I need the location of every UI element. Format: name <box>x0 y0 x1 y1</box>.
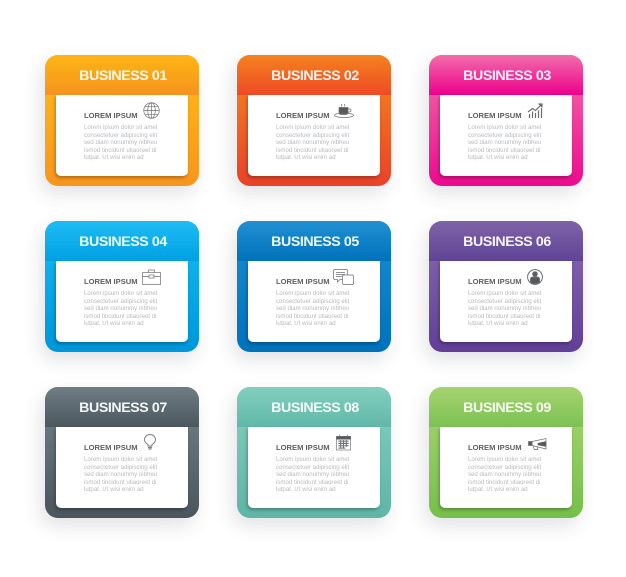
icon: person <box>527 269 543 285</box>
icon: chat bubbles <box>333 269 354 285</box>
body text 02: ismod tincidunt utiaoreet di <box>276 146 348 154</box>
body text 04: Lorem ipsum dolor sit amet <box>84 290 158 297</box>
subheading 04: LOREM IPSUM <box>84 277 138 286</box>
body text 09: Lorem ipsum dolor sit amet <box>468 456 542 463</box>
body text 07 <box>84 456 158 493</box>
icon: megaphone <box>528 438 546 450</box>
body text 08: ismod tincidunt utiaoreet di <box>276 478 348 486</box>
body text 02: Lorem ipsum dolor sit amet <box>276 124 350 131</box>
subheading 05: LOREM IPSUM <box>276 277 330 286</box>
heading 01: BUSINESS 01 <box>79 68 167 84</box>
white content panel 05 <box>248 261 380 342</box>
body text 06: Lorem ipsum dolor sit amet <box>468 290 542 297</box>
body text 09: lutpat. Ut wisi enim ad <box>468 486 528 493</box>
body text 01 <box>84 124 158 161</box>
icon: globe <box>143 102 160 119</box>
white content panel 03 <box>440 95 572 176</box>
panel: business 09 <box>429 387 583 518</box>
body text 06 <box>468 290 542 327</box>
body text 04 <box>84 290 158 327</box>
body text 03: lutpat. Ut wisi enim ad <box>468 154 528 161</box>
white content panel 07 <box>56 427 188 508</box>
panel: business 03 <box>429 55 583 186</box>
body text 09: ismod tincidunt utiaoreet di <box>468 478 540 486</box>
body text 08: sed diam nonummy nibheu <box>276 471 349 478</box>
body text 04: ismod tincidunt utiaoreet di <box>84 312 156 320</box>
heading 05: BUSINESS 05 <box>271 234 359 250</box>
header band 05 <box>237 221 391 261</box>
body text 07: ismod tincidunt utiaoreet di <box>84 478 156 486</box>
body text 06: ismod tincidunt utiaoreet di <box>468 312 540 320</box>
heading 06: BUSINESS 06 <box>463 234 551 250</box>
header band 01 <box>45 55 199 95</box>
body text 04: lutpat. Ut wisi enim ad <box>84 320 144 327</box>
subheading 06: LOREM IPSUM <box>468 277 522 286</box>
body text 05: sed diam nonummy nibheu <box>276 305 349 312</box>
body text 09 <box>468 456 542 493</box>
white content panel 02 <box>248 95 380 176</box>
header band 08 <box>237 387 391 427</box>
subheading 08: LOREM IPSUM <box>276 443 330 452</box>
panel: business 06 <box>429 221 583 352</box>
panel: business 05 <box>237 221 391 352</box>
body text 08: lutpat. Ut wisi enim ad <box>276 486 336 493</box>
body text 01: ismod tincidunt utiaoreet di <box>84 146 156 154</box>
subheading 02: LOREM IPSUM <box>276 111 330 120</box>
body text 04: consectetuer adipiscing elit <box>84 298 157 304</box>
body text 05: ismod tincidunt utiaoreet di <box>276 312 348 320</box>
panel: business 07 <box>45 387 199 518</box>
header band 06 <box>429 221 583 261</box>
body text 01: consectetuer adipiscing elit <box>84 132 157 138</box>
white content panel 06 <box>440 261 572 342</box>
heading 03: BUSINESS 03 <box>463 68 551 84</box>
body text 02: lutpat. Ut wisi enim ad <box>276 154 336 161</box>
body text 03: consectetuer adipiscing elit <box>468 132 541 138</box>
body text 07: consectetuer adipiscing elit <box>84 464 157 470</box>
panel: business 04 <box>45 221 199 352</box>
body text 06: sed diam nonummy nibheu <box>468 305 541 312</box>
subheading 01: LOREM IPSUM <box>84 111 138 120</box>
body text 01: sed diam nonummy nibheu <box>84 139 157 146</box>
header band 03 <box>429 55 583 95</box>
subheading 07: LOREM IPSUM <box>84 443 138 452</box>
body text 08: Lorem ipsum dolor sit amet <box>276 456 350 463</box>
body text 09: consectetuer adipiscing elit <box>468 464 541 470</box>
body text 06: lutpat. Ut wisi enim ad <box>468 320 528 327</box>
body text 06: consectetuer adipiscing elit <box>468 298 541 304</box>
body text 02 <box>276 124 350 161</box>
body text 08: consectetuer adipiscing elit <box>276 464 349 470</box>
white content panel 01 <box>56 95 188 176</box>
body text 05: lutpat. Ut wisi enim ad <box>276 320 336 327</box>
body text 07: sed diam nonummy nibheu <box>84 471 157 478</box>
body text 03 <box>468 124 542 161</box>
panel: business 08 <box>237 387 391 518</box>
body text 03: Lorem ipsum dolor sit amet <box>468 124 542 131</box>
body text 03: sed diam nonummy nibheu <box>468 139 541 146</box>
icon: coffee cup <box>334 104 354 118</box>
subheading 09: LOREM IPSUM <box>468 443 522 452</box>
panel: business 01 <box>45 55 199 186</box>
heading 08: BUSINESS 08 <box>271 400 359 416</box>
icon: briefcase <box>142 270 161 285</box>
white content panel 08 <box>248 427 380 508</box>
body text 07: lutpat. Ut wisi enim ad <box>84 486 144 493</box>
icon: calendar <box>336 434 351 450</box>
subheading 03: LOREM IPSUM <box>468 111 522 120</box>
white content panel 09 <box>440 427 572 508</box>
icon: light bulb <box>144 434 156 450</box>
body text 07: Lorem ipsum dolor sit amet <box>84 456 158 463</box>
body text 08 <box>276 456 350 493</box>
body text 02: sed diam nonummy nibheu <box>276 139 349 146</box>
body text 05: Lorem ipsum dolor sit amet <box>276 290 350 297</box>
body text 04: sed diam nonummy nibheu <box>84 305 157 312</box>
heading 09: BUSINESS 09 <box>463 400 551 416</box>
header band 07 <box>45 387 199 427</box>
heading 07: BUSINESS 07 <box>79 400 167 416</box>
body text 01: lutpat. Ut wisi enim ad <box>84 154 144 161</box>
body text 09: sed diam nonummy nibheu <box>468 471 541 478</box>
body text 02: consectetuer adipiscing elit <box>276 132 349 138</box>
header band 09 <box>429 387 583 427</box>
header band 02 <box>237 55 391 95</box>
body text 03: ismod tincidunt utiaoreet di <box>468 146 540 154</box>
white content panel 04 <box>56 261 188 342</box>
heading 04: BUSINESS 04 <box>79 234 167 250</box>
icon: growth chart <box>528 103 543 118</box>
body text 05 <box>276 290 350 327</box>
heading 02: BUSINESS 02 <box>271 68 359 84</box>
body text 01: Lorem ipsum dolor sit amet <box>84 124 158 131</box>
panel: business 02 <box>237 55 391 186</box>
header band 04 <box>45 221 199 261</box>
body text 05: consectetuer adipiscing elit <box>276 298 349 304</box>
